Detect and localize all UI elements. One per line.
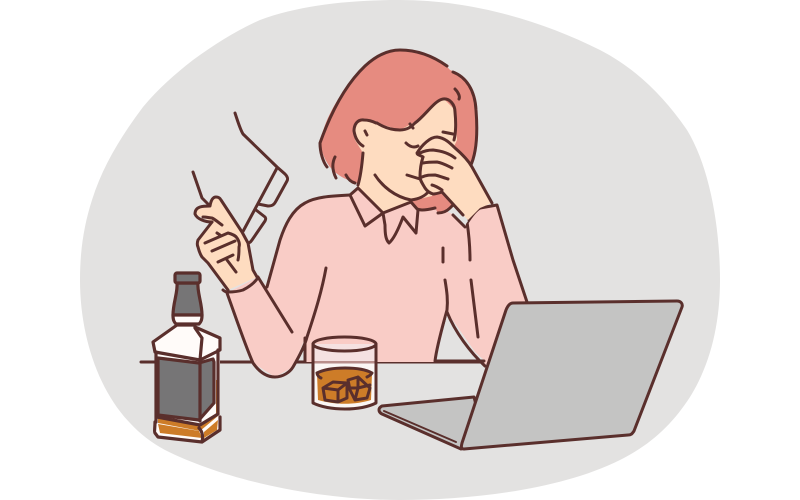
glasses: [193, 113, 288, 243]
face and neck: [354, 98, 457, 213]
woman: [227, 50, 527, 377]
table edge: [141, 360, 490, 364]
whiskey bottle: [153, 273, 220, 442]
laptop lid: [461, 301, 682, 449]
bottle neck: [173, 283, 202, 315]
cuff: [223, 279, 257, 292]
hand holding glasses: [195, 197, 257, 292]
laptop: [379, 301, 682, 449]
bottle body: [153, 325, 220, 442]
laptop base: [379, 397, 480, 449]
collar: [350, 188, 418, 243]
sweater: [227, 195, 527, 377]
hair under chin: [405, 170, 465, 213]
hair back: [320, 50, 477, 185]
hand on nose: [417, 137, 492, 220]
background blob: [80, 0, 720, 500]
whiskey glass: [313, 337, 376, 409]
black label: [158, 358, 214, 420]
ice cubes: [323, 382, 347, 402]
gap between hand and sweater: [452, 210, 468, 227]
whiskey fill: [158, 380, 218, 438]
bottle details: [153, 325, 220, 360]
bottle cap: [175, 273, 200, 283]
